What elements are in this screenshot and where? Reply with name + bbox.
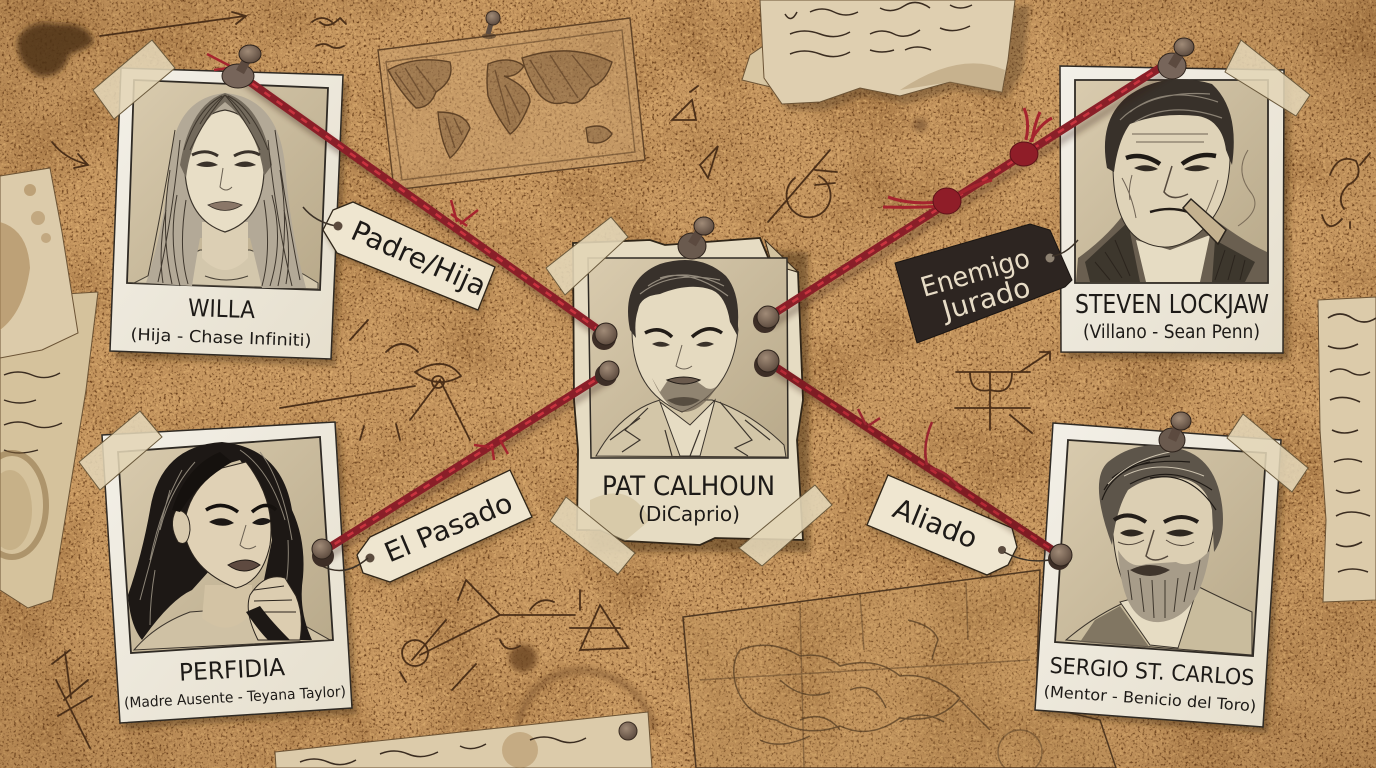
tape: top left <box>546 217 628 295</box>
role: Willa: (Hija - Chase Infiniti) <box>130 325 312 350</box>
card: Perfidia <box>79 411 357 729</box>
sketched Europe map <box>683 570 1116 768</box>
tag: El Pasado <box>322 470 534 586</box>
tag: Aliado <box>867 475 1058 579</box>
pin: Sergio St. Carlos top <box>1159 412 1191 452</box>
top note paper <box>742 0 1030 110</box>
pin on map <box>482 11 500 39</box>
tag: Padre/Hija <box>303 202 497 314</box>
role: Pat Calhoun: (DiCaprio) <box>638 502 740 526</box>
right handwritten note <box>1318 297 1376 602</box>
name: Steven Lockjaw: STEVEN LOCKJAW <box>1075 290 1269 320</box>
pin: Steven Lockjaw <box>1158 38 1194 79</box>
card: Willa <box>93 40 348 366</box>
string: Perfidia to Pat <box>322 372 611 558</box>
card paper <box>1035 423 1281 727</box>
card paper <box>110 68 343 359</box>
name: Pat Calhoun: PAT CALHOUN <box>602 471 775 502</box>
string: Willa to Pat <box>207 54 609 341</box>
pin: Pat string end for Steven <box>753 306 779 333</box>
pin: Sergio string end <box>1048 544 1072 570</box>
tag label: Aliado <box>888 492 982 555</box>
pin: Perfidia string end <box>312 539 334 567</box>
pin: Pat string end for Perfidia <box>595 361 619 386</box>
tape: bottom left <box>550 497 635 574</box>
portrait: Steven Lockjaw <box>1075 79 1268 283</box>
bottom note paper <box>275 712 652 768</box>
pin: Pat string end for Sergio <box>754 350 779 377</box>
portrait: Sergio St. Carlos <box>1055 440 1266 656</box>
tag label line 1: Enemigo <box>917 243 1034 304</box>
card: Steven Lockjaw <box>1060 40 1310 360</box>
tape: Willa <box>93 40 175 119</box>
name: Perfidia: PERFIDIA <box>178 653 286 687</box>
pin: Pat Calhoun top <box>678 217 714 259</box>
name: Willa: WILLA <box>188 294 256 324</box>
tag label line 2: Jurado <box>937 272 1034 327</box>
tape: bottom right <box>739 485 832 566</box>
tape: Sergio St. Carlos <box>1227 414 1308 492</box>
tape: Perfidia <box>79 411 162 490</box>
tag: Enemigo Jurado <box>895 224 1078 343</box>
card: Sergio St. Carlos <box>1035 414 1308 733</box>
role: Perfidia: (Madre Ausente - Teyana Taylor) <box>124 684 346 712</box>
name: Sergio St. Carlos: SERGIO ST. CARLOS <box>1049 654 1255 691</box>
string: Pat to Sergio <box>768 362 1063 561</box>
left torn paper <box>0 168 78 358</box>
role: Steven Lockjaw: (Villano - Sean Penn) <box>1083 322 1260 343</box>
portrait: Willa <box>127 80 328 290</box>
knots in string <box>883 108 1052 214</box>
pin: Pat string end for Willa <box>592 323 617 350</box>
tape: Steven Lockjaw <box>1225 40 1310 116</box>
stains on the cork <box>17 23 927 730</box>
card paper <box>573 238 803 545</box>
role: Sergio St. Carlos: (Mentor - Benicio del Toro) <box>1043 683 1257 715</box>
portrait: Pat Calhoun <box>588 258 788 458</box>
string: Pat to Steven <box>767 55 1184 325</box>
tag label: El Pasado <box>380 488 517 569</box>
portrait: Perfidia <box>118 437 333 653</box>
sketched world map <box>378 18 645 190</box>
pin: Willa <box>222 45 261 88</box>
tag label: Padre/Hija <box>346 214 491 303</box>
card paper <box>1060 66 1284 353</box>
card: Pat Calhoun <box>546 217 832 574</box>
card paper <box>102 422 352 723</box>
left stained note <box>0 292 98 608</box>
